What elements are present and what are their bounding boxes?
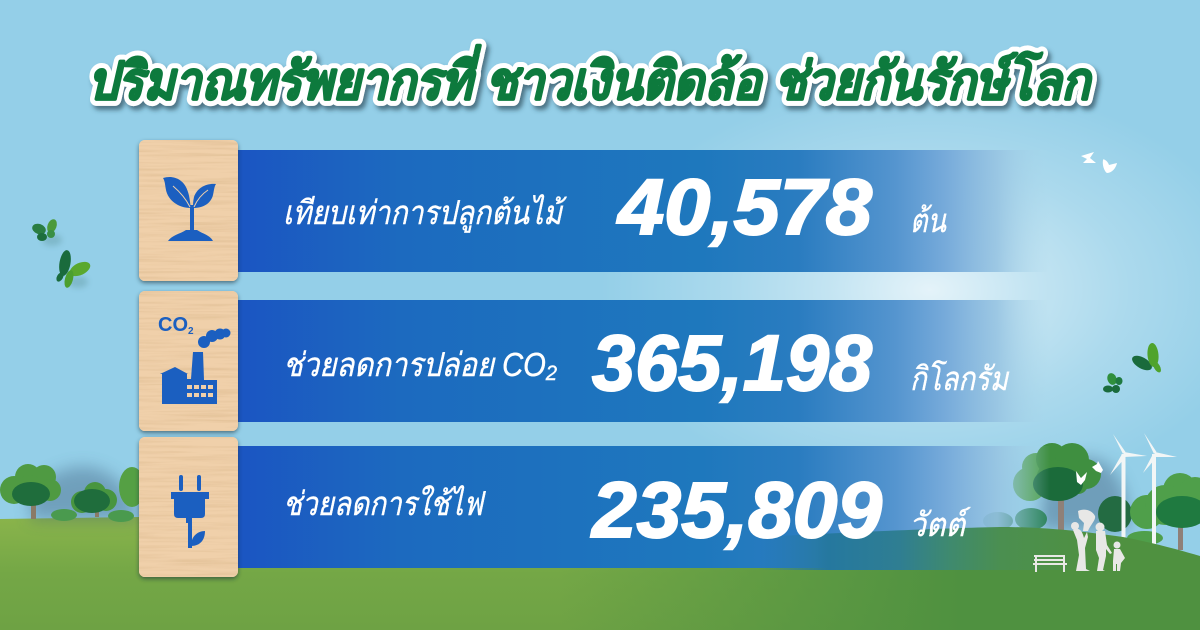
icon: plug with leaf <box>171 475 209 548</box>
bar: row 1 <box>238 150 1050 272</box>
bar: row 2 <box>238 300 1050 422</box>
row 1: unit: ต้น <box>910 202 947 239</box>
row 2: unit: กิโลกรัม <box>910 360 1010 397</box>
row 3: label: ช่วยลดการใช้ไฟ <box>283 485 486 522</box>
row 1: label: เทียบเท่าการปลูกต้นไม้ <box>283 194 567 233</box>
ground: main green <box>0 517 1200 630</box>
right scene: trees <box>983 443 1200 550</box>
icon: factory with CO2: 2 <box>188 326 194 337</box>
row 2: wood tile with factory icon <box>139 291 238 431</box>
row 2: label: ช่วยลดการปล่อย CO₂ <box>283 346 557 383</box>
butterflies: left green <box>31 218 93 289</box>
icon: factory with CO2 <box>158 314 230 404</box>
title: ปริมาณทรัพยากรที่ ชาวเงินติดล้อ ช่วยกันรักษ์โลก <box>88 44 1093 111</box>
icon: factory with CO2: CO <box>158 314 188 336</box>
bar: row 3 <box>238 446 1050 568</box>
left trees <box>0 464 145 522</box>
row 3: value: 235,809 <box>590 465 882 554</box>
icon: sprout <box>163 177 216 241</box>
row 3: unit: วัตต์ <box>909 506 971 543</box>
row 3: wood tile with plug icon <box>139 437 238 577</box>
row 1: value: 40,578 <box>616 162 872 251</box>
right scene: hill <box>760 527 1200 570</box>
row 1: wood tile with sprout icon <box>139 140 238 281</box>
row 2: value: 365,198 <box>592 318 872 407</box>
title: ปริมาณทรัพยากรที่ ชาวเงินติดล้อ ช่วยกันรักษ์โลก <box>88 44 1093 111</box>
right scene: wind turbines <box>1110 433 1177 544</box>
right scene: family and bench <box>1033 510 1125 572</box>
butterflies: right green and white <box>1081 152 1163 393</box>
